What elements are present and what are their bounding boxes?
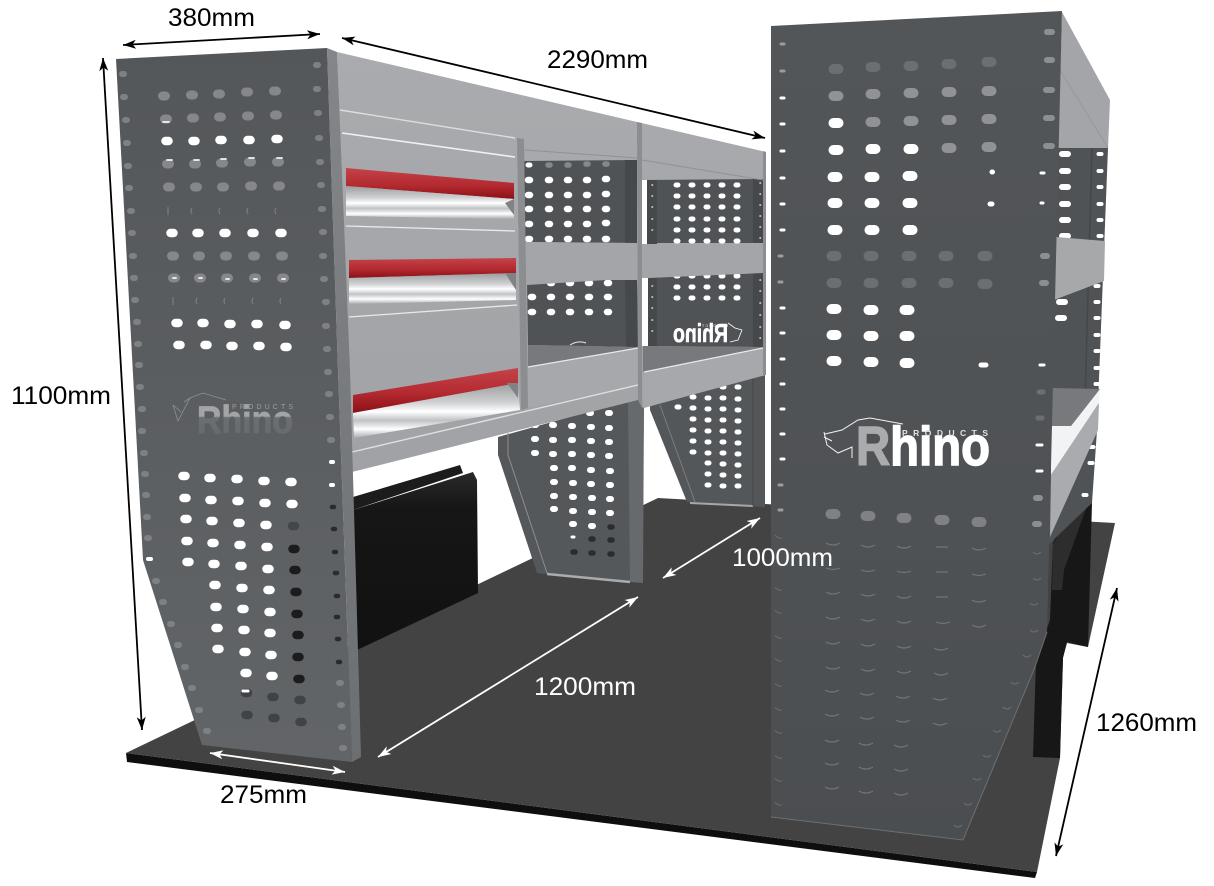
- left panel lower holes: white: [182, 476, 294, 676]
- bay 1: upper back wall: [524, 160, 637, 243]
- label: 1200mm: 1200mm: [534, 673, 636, 701]
- dimension arrow: 1000mm: [663, 518, 760, 578]
- logo: Rhino on right panel: Rhino: [856, 415, 990, 477]
- rear upright leg: [650, 372, 765, 507]
- bay 2: lower back wall: [642, 273, 763, 347]
- left panel edge holes: [122, 65, 344, 748]
- right end panel: [771, 11, 1062, 840]
- dimension arrow: 1200mm: [378, 597, 638, 757]
- logo: mirrored Rhino on back wall: [673, 318, 742, 348]
- dimension arrow: 1100mm: [103, 58, 142, 730]
- label: 1260mm: 1260mm: [1096, 709, 1197, 737]
- logo: Rhino on left panel: Rhino: [197, 399, 293, 442]
- wheel arch box: right: [1033, 503, 1092, 758]
- left panel lower holes: dark: [292, 522, 295, 530]
- dimension arrow: 380mm: [123, 34, 320, 45]
- dimension arrow: 275mm: [210, 753, 345, 772]
- bay 1: lower back wall: [527, 280, 638, 347]
- right shelving unit seen from side: [1048, 12, 1110, 545]
- seams and posts: [517, 122, 766, 410]
- logo: Rhino on left panel: PRODUCTS: [232, 404, 293, 411]
- wheel arch box: left: [353, 465, 478, 650]
- logo: Rhino on left panel: [173, 393, 293, 442]
- drawer 2 with red handle: [349, 258, 517, 317]
- label: 1000mm: 1000mm: [732, 544, 833, 572]
- right panel edge holes: [779, 44, 784, 510]
- right panel upper holes: mid grey: [834, 91, 992, 148]
- dimension arrow: 1260mm: [1056, 588, 1117, 856]
- bay 2: shelves: [643, 244, 763, 408]
- label: 275mm: 275mm: [220, 781, 307, 809]
- bay 1: shelves: [525, 242, 638, 408]
- bay 2: upper back wall: [642, 179, 763, 244]
- label: 380mm: 380mm: [168, 4, 255, 32]
- logo: Rhino on right panel: PRODUCTS: [902, 428, 988, 438]
- right panel lower holes: faint: [825, 543, 986, 795]
- right panel lower holes: first row: [830, 514, 982, 522]
- left end panel: [116, 48, 361, 762]
- right panel upper holes: dim: [832, 62, 992, 284]
- logo: mirrored Rhino on back wall: Rhino: [673, 318, 728, 348]
- left panel upper holes: white: [166, 139, 288, 347]
- label: 2290mm: 2290mm: [547, 46, 648, 74]
- drawer 3 with red handle: [352, 368, 638, 452]
- dimension arrow: 2290mm: [342, 38, 765, 138]
- logo: mirrored Rhino on back wall: PRODUCTS: [698, 323, 728, 328]
- middle upright leg: [498, 398, 644, 583]
- drawer 1 with red handle: [340, 110, 515, 231]
- floor mat: [126, 498, 1115, 878]
- shelving unit: main body: [337, 52, 766, 472]
- left panel upper holes: grey: [162, 91, 284, 278]
- right panel upper holes: white: [832, 123, 914, 363]
- label: 1100mm: 1100mm: [11, 382, 111, 410]
